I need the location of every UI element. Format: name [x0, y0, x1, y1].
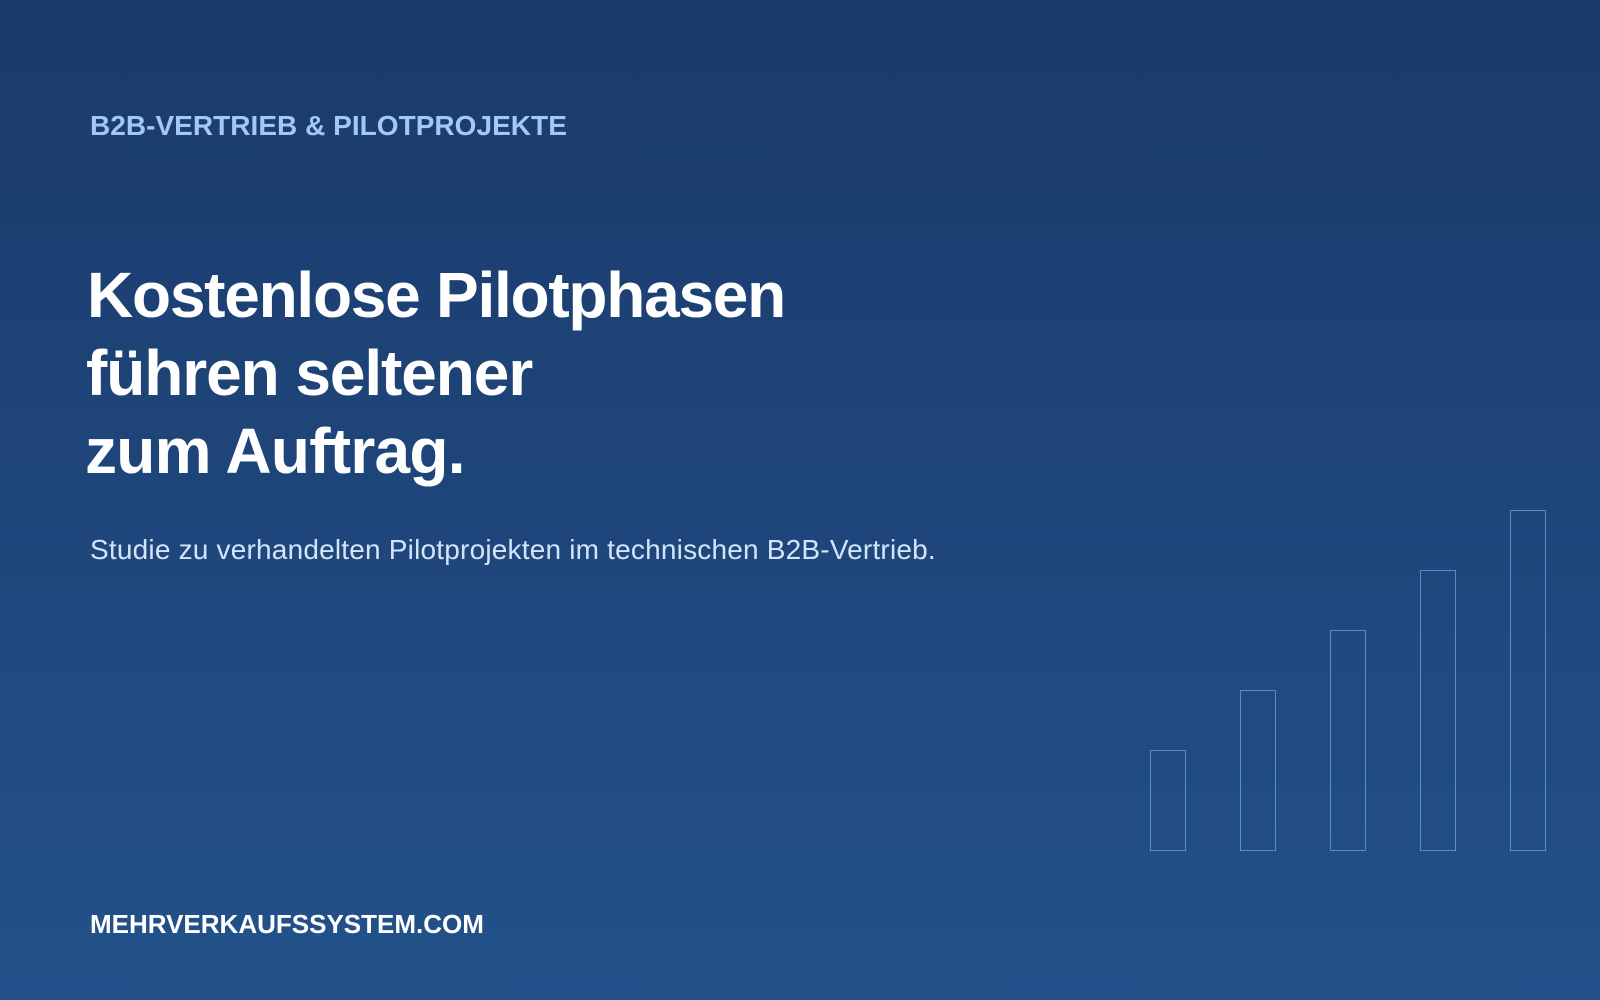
- bar 1: [1150, 750, 1186, 850]
- bar 4: [1420, 570, 1456, 850]
- decorative bar chart: [1150, 510, 1546, 851]
- title: [85, 259, 785, 487]
- title: führen seltener: [86, 337, 532, 409]
- title: zum Auftrag.: [85, 415, 465, 487]
- bar 3: [1330, 630, 1366, 850]
- title: Kostenlose Pilotphasen: [87, 259, 785, 331]
- bar 2: [1240, 690, 1276, 850]
- eyebrow label: B2B-VERTRIEB & PILOTPROJEKTE: [90, 110, 567, 141]
- bar 5: [1510, 510, 1546, 850]
- subtitle: Studie zu verhandelten Pilotprojekten im technischen B2B-Vertrieb.: [90, 534, 936, 565]
- footer website: MEHRVERKAUFSSYSTEM.COM: [90, 909, 484, 939]
